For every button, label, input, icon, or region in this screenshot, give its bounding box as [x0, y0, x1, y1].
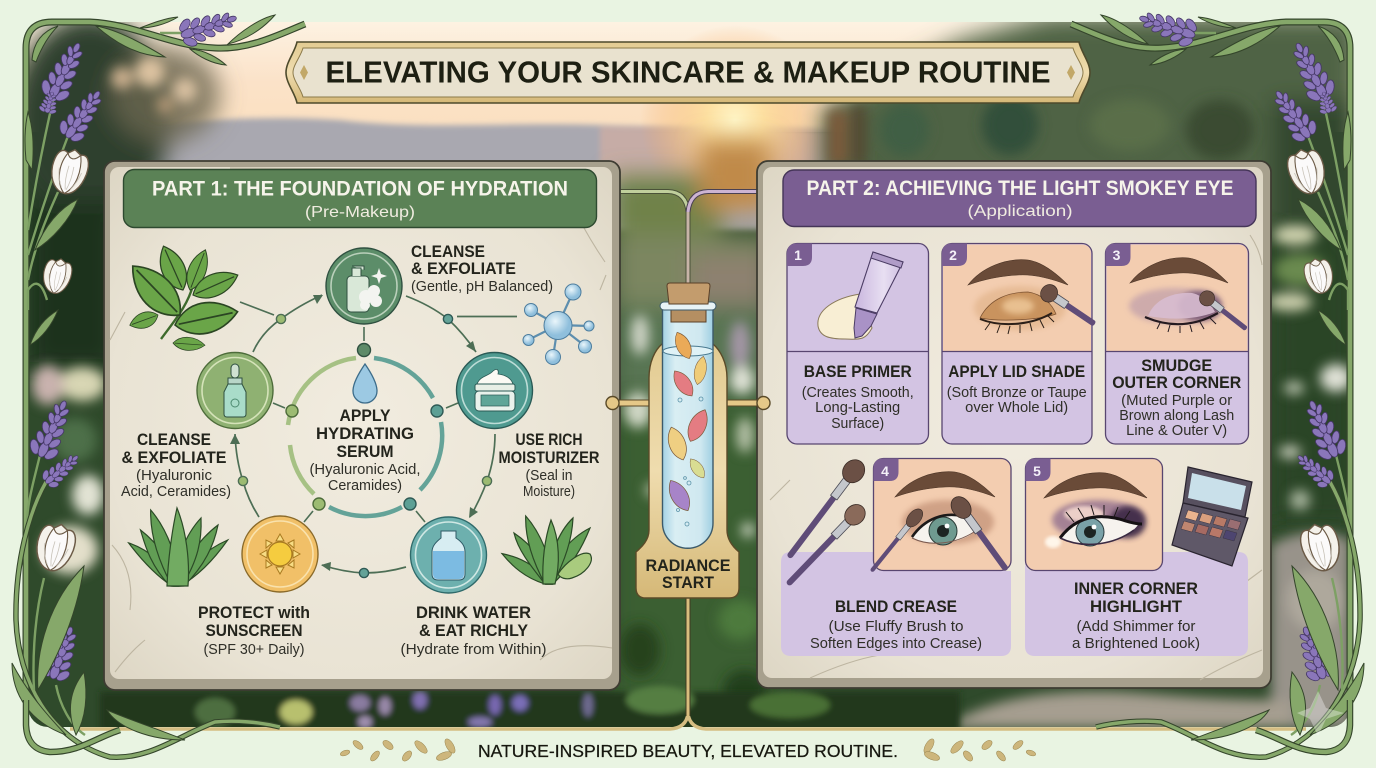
badge 5 [1026, 458, 1050, 481]
heading banner part 1: (Pre-Makeup) [305, 204, 415, 221]
label: protect with sunscreen: SUNSCREEN [206, 622, 302, 640]
plaque with arms [606, 344, 770, 598]
card 4: blend crease [781, 455, 1012, 656]
label: use rich moisturizer [498, 431, 600, 500]
badge 2 [942, 244, 967, 266]
text: apply hydrating serum: HYDRATING [316, 425, 414, 443]
card 5: inner corner highlight: HIGHLIGHT [1090, 598, 1182, 616]
icon: eye with smudged outer corner [1129, 258, 1250, 334]
footer tagline: NATURE-INSPIRED BEAUTY, ELEVATED ROUTINE. [478, 741, 898, 761]
heading banner part 1 [124, 170, 596, 228]
label: drink water: DRINK WATER [416, 604, 531, 622]
label: protect with sunscreen [198, 604, 310, 658]
label: use rich moisturizer: MOISTURIZER [498, 449, 600, 467]
icon: aloe plant right [502, 516, 591, 584]
label: cleanse and exfoliate left: & EXFOLIATE [122, 449, 226, 467]
label: drink water [400, 604, 546, 658]
text: apply hydrating serum: SERUM [336, 443, 394, 461]
text: apply hydrating serum: Ceramides) [328, 478, 402, 494]
card 5: inner corner highlight: INNER CORNER [1074, 580, 1198, 598]
card 3: smudge outer corner: Brown along Lash [1119, 408, 1234, 424]
left floral frame [12, 2, 305, 757]
card 1: base primer: Long-Lasting [815, 400, 900, 416]
card 5: inner corner highlight: 5 [1033, 463, 1041, 479]
right floral frame [1071, 2, 1364, 757]
badge 1 [787, 244, 812, 266]
footer leaves right [922, 737, 1037, 763]
icon: eye with two brushes [868, 472, 1012, 573]
label: cleanse and exfoliate left [121, 431, 231, 500]
node: moisturizer [456, 352, 532, 428]
card 1: base primer: (Creates Smooth, [802, 385, 914, 401]
card 2: apply lid shade: 2 [949, 247, 957, 263]
label: cleanse and exfoliate top: CLEANSE [411, 243, 485, 261]
heading banner part 2: PART 2: ACHIEVING THE LIGHT SMOKEY EYE [806, 177, 1234, 200]
label: cleanse and exfoliate top: (Gentle, pH Balanced) [411, 279, 553, 295]
radiance start plaque and test tube [606, 283, 770, 598]
connector lines: part headers to tube [596, 192, 783, 716]
label: radiance start [646, 557, 730, 592]
panel: part 2 smokey eye [757, 161, 1271, 688]
heading banner part 2 [783, 170, 1256, 226]
node: cleanser [326, 248, 402, 324]
text: apply hydrating serum [310, 407, 420, 494]
card 3: smudge outer corner: 3 [1113, 247, 1121, 263]
card 1: base primer: 1 [794, 247, 802, 263]
central hydrating ring [273, 327, 458, 522]
title: ELEVATING YOUR SKINCARE & MAKEUP ROUTINE [326, 56, 1050, 90]
card 3: smudge outer corner [1106, 244, 1250, 444]
icon: primer tube [818, 252, 903, 339]
label: protect with sunscreen: PROTECT with [198, 604, 310, 622]
icon: loose makeup brushes [782, 455, 869, 589]
test tube with petals [660, 283, 716, 548]
label: cleanse and exfoliate top [411, 243, 553, 295]
icon: aloe plant left [129, 508, 228, 586]
label: radiance start: START [662, 574, 714, 592]
icon: finished smokey eye [1044, 473, 1147, 548]
card 3: smudge outer corner: OUTER CORNER [1112, 374, 1241, 392]
card 4: blend crease: BLEND CREASE [835, 598, 957, 616]
title plaque [286, 42, 1090, 103]
icon: green tea sprig [121, 242, 242, 352]
card 3: smudge outer corner: Line & Outer V) [1126, 423, 1227, 439]
label: cleanse and exfoliate top: & EXFOLIATE [411, 260, 516, 278]
label: cleanse and exfoliate left: CLEANSE [137, 431, 211, 449]
bottom gold border line [70, 714, 1306, 729]
card 5: inner corner highlight: a Brightened Look) [1072, 636, 1200, 652]
text: apply hydrating serum: APPLY [340, 407, 390, 425]
node: serum dropper [197, 352, 273, 428]
panel: part 1 foundation of hydration [104, 161, 620, 690]
footer leaves left [339, 737, 457, 763]
node: drink water [410, 517, 486, 593]
card 1: base primer: BASE PRIMER [804, 363, 912, 381]
card 2: apply lid shade: (Soft Bronze or Taupe [947, 385, 1087, 401]
icon: molecule [523, 284, 594, 364]
label: drink water: & EAT RICHLY [419, 622, 528, 640]
cycle arrows [230, 295, 517, 578]
card 5: inner corner highlight [1025, 458, 1252, 656]
label: use rich moisturizer: USE RICH [516, 431, 582, 449]
label: use rich moisturizer: Moisture) [523, 484, 575, 500]
label: use rich moisturizer: (Seal in [526, 468, 572, 484]
icon: water drop [353, 364, 377, 403]
card 4: blend crease: (Use Fluffy Brush to [828, 619, 964, 635]
badge 3 [1106, 244, 1130, 266]
card 2: apply lid shade [942, 244, 1098, 444]
badge 4 [874, 458, 898, 481]
label: cleanse and exfoliate left: Acid, Ceramides) [121, 484, 231, 500]
label: radiance start: RADIANCE [646, 557, 730, 575]
watermark sparkle [1297, 691, 1344, 736]
node: sunscreen [242, 516, 318, 592]
icon: eye with lid shade [968, 260, 1098, 334]
label: protect with sunscreen: (SPF 30+ Daily) [204, 642, 304, 658]
card 5: inner corner highlight: (Add Shimmer for [1076, 619, 1196, 635]
footer tagline [339, 737, 1037, 763]
card 1: base primer: Surface) [831, 416, 884, 432]
text: apply hydrating serum: (Hyaluronic Acid, [310, 462, 420, 478]
card 2: apply lid shade: over Whole Lid) [965, 400, 1068, 416]
card 3: smudge outer corner: (Muted Purple or [1121, 393, 1232, 409]
card 4: blend crease: Soften Edges into Crease) [810, 636, 982, 652]
heading banner part 1: PART 1: THE FOUNDATION OF HYDRATION [152, 178, 568, 200]
heading banner part 2: (Application) [968, 203, 1072, 220]
card 1: base primer [787, 244, 928, 444]
card 2: apply lid shade: APPLY LID SHADE [948, 363, 1085, 381]
label: cleanse and exfoliate left: (Hyaluronic [136, 468, 212, 484]
card 3: smudge outer corner: SMUDGE [1141, 357, 1212, 375]
icon: eyeshadow palette [1172, 467, 1252, 566]
label: drink water: (Hydrate from Within) [400, 642, 546, 658]
card 4: blend crease: 4 [881, 463, 889, 479]
